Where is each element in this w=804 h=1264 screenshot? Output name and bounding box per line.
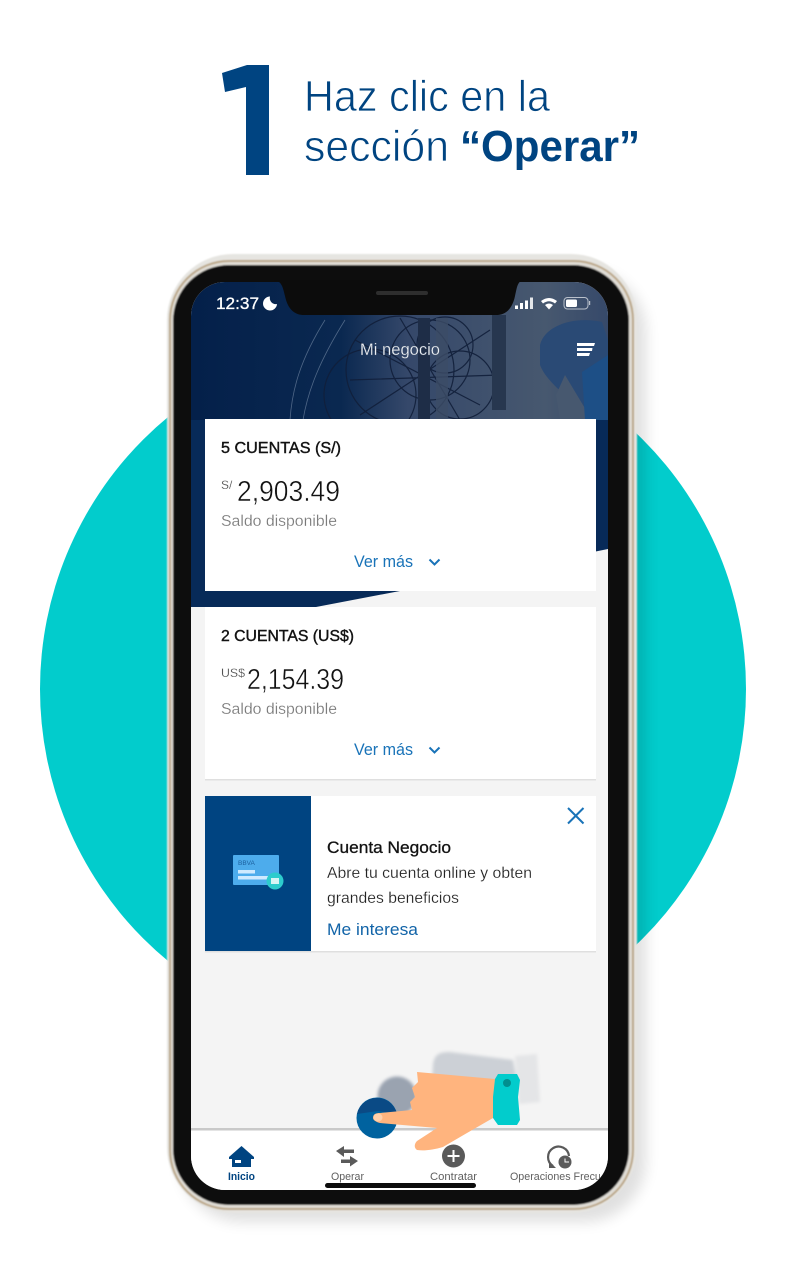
home indicator xyxy=(325,1183,476,1188)
hero header image xyxy=(191,282,608,607)
status bar time: 12:37 xyxy=(216,294,259,313)
card: dollars account: Saldo disponible xyxy=(221,701,337,718)
cuff xyxy=(493,1074,520,1125)
card: soles account: Ver más xyxy=(354,553,413,571)
promo card: Abre tu cuenta online y obten xyxy=(327,865,532,882)
menu icon xyxy=(577,343,595,356)
notch xyxy=(274,280,524,315)
card: soles account: 2,903.49 xyxy=(237,476,340,508)
card: soles account xyxy=(205,419,596,591)
icon: BBVA card xyxy=(233,855,284,890)
fingertip xyxy=(374,1114,382,1122)
header title: Mi negocio xyxy=(360,340,440,359)
hand shadow xyxy=(378,1052,540,1116)
nav: Contratar: Contratar xyxy=(430,1171,477,1183)
tap circle xyxy=(356,1098,398,1138)
screen background xyxy=(191,282,608,1190)
phone shadow xyxy=(180,270,646,1222)
promo card: grandes beneficios xyxy=(327,890,459,907)
promo card xyxy=(205,796,596,952)
screen xyxy=(191,282,627,1190)
card: dollars account xyxy=(205,607,596,780)
hand xyxy=(373,1072,495,1150)
nav: Operar xyxy=(331,1146,364,1183)
heading text: sección xyxy=(304,122,449,171)
phone body xyxy=(167,254,637,1213)
nav: Inicio: Inicio xyxy=(228,1171,255,1183)
card: dollars account: Ver más xyxy=(354,741,413,759)
promo card: Cuenta Negocio xyxy=(327,839,451,857)
card: soles account: 5 CUENTAS (S/) xyxy=(221,440,341,457)
nav: Operar: Operar xyxy=(331,1171,364,1183)
phone xyxy=(167,254,646,1222)
nav: Contratar xyxy=(430,1144,477,1183)
heading text xyxy=(304,72,640,171)
hand pointer illustration xyxy=(356,1052,540,1150)
heading text: Haz clic en la xyxy=(304,72,550,121)
card: dollars account: 2,154.39 xyxy=(247,664,344,696)
card: dollars account: US$ xyxy=(221,666,245,680)
card: soles account: S/ xyxy=(221,478,233,492)
bottom navigation bar xyxy=(191,1128,627,1190)
nav: Operaciones Frecuentes: Operaciones Frecuentes xyxy=(510,1171,627,1183)
status bar icons xyxy=(515,298,590,310)
teal background circle xyxy=(40,336,746,1042)
heading number 1 xyxy=(222,65,269,175)
card: soles account: Saldo disponible xyxy=(221,513,337,530)
heading text: “Operar” xyxy=(460,122,640,171)
promo card: Me interesa xyxy=(327,920,419,939)
icon: BBVA card: BBVA xyxy=(238,860,256,867)
icon: close xyxy=(568,808,584,824)
nav: Operaciones Frecuentes xyxy=(510,1145,600,1182)
status bar time xyxy=(216,294,277,313)
card: dollars account: 2 CUENTAS (US$) xyxy=(221,628,354,645)
nav: Inicio xyxy=(228,1146,254,1180)
